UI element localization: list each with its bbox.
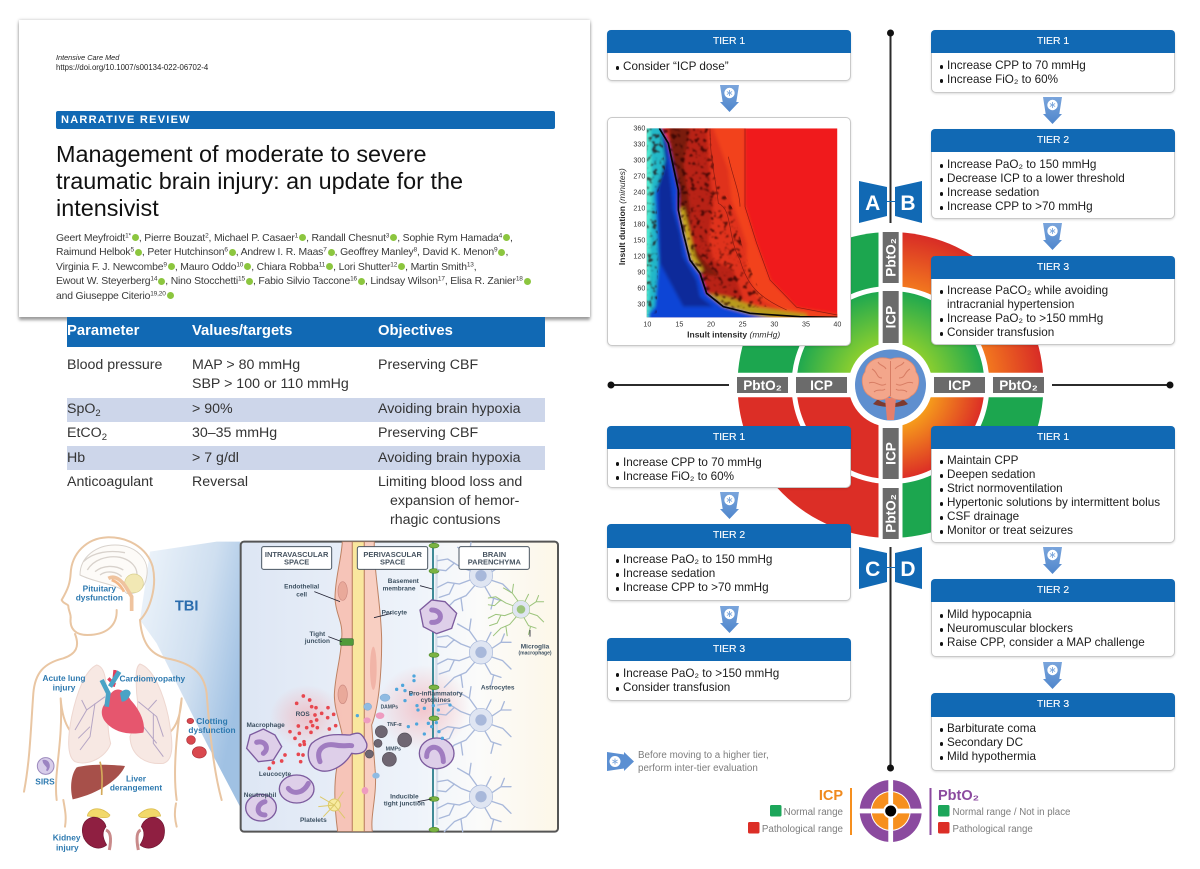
heart bbox=[102, 670, 144, 734]
panel D tier 2 bbox=[931, 579, 1175, 657]
cell and molecule labels: (macrophage) bbox=[518, 651, 552, 657]
badge D: D bbox=[900, 558, 916, 581]
region headers: SPACE bbox=[380, 558, 405, 567]
TBI label: TBI bbox=[175, 599, 198, 615]
row: anticoagulant: Limiting blood loss and bbox=[378, 474, 522, 490]
cell and molecule labels: cytokines bbox=[421, 697, 451, 704]
platelets bbox=[318, 792, 345, 818]
axis ticks: 20 bbox=[707, 320, 715, 328]
cell and molecule labels: tight junction bbox=[384, 801, 425, 808]
liver bbox=[71, 762, 125, 799]
axis ticks: 240 bbox=[633, 188, 645, 196]
row: anticoagulant: Reversal bbox=[192, 474, 248, 490]
cell and molecule labels: membrane bbox=[383, 585, 416, 592]
badge C: C bbox=[865, 558, 880, 581]
cell and molecule labels: Inducible bbox=[390, 793, 419, 800]
wheel inner ICP ring bbox=[796, 291, 984, 479]
article title bbox=[56, 141, 463, 221]
arrow D2 bbox=[1043, 662, 1062, 689]
panel B tier 2: TIER 2 bbox=[1037, 135, 1069, 146]
row: blood pressure: SBP > 100 or 110 mmHg bbox=[192, 376, 349, 392]
panel D tier 1: Strict normoventilation bbox=[947, 482, 1063, 495]
axis ticks: 330 bbox=[633, 141, 645, 149]
badge D bbox=[895, 547, 922, 589]
wheel grey sector labels: ICP bbox=[884, 306, 898, 328]
row: anticoagulant: rhagic contusions bbox=[390, 512, 500, 528]
astrocytes bbox=[438, 542, 511, 832]
row: SpO2 bbox=[67, 398, 545, 422]
wheel grey sector labels: ICP bbox=[810, 378, 833, 393]
cell and molecule labels bbox=[244, 578, 552, 824]
panel D tier 1: Hypertonic solutions by intermittent bolus bbox=[947, 496, 1160, 509]
region headers: BRAIN bbox=[482, 550, 506, 559]
panel B tier 3: TIER 3 bbox=[1037, 262, 1069, 273]
badge B bbox=[895, 181, 922, 223]
row: blood pressure: Preserving CBF bbox=[378, 357, 478, 373]
cell and molecule labels: Basement bbox=[388, 578, 420, 585]
author list: Geert Meyfroidt1* , Pierre Bouzat2, Michael P. Casaer1 , Randall Chesnut3 , Sophie Rym Hamada4 , bbox=[56, 232, 513, 244]
paper header card bbox=[19, 20, 590, 317]
organ labels bbox=[35, 583, 236, 852]
reactive oxygen species dots bbox=[269, 696, 336, 768]
cell and molecule labels: DAMPs bbox=[381, 704, 398, 710]
panel B tier 2: Increase PaO₂ to 150 mmHg bbox=[947, 158, 1096, 171]
vessel wall bbox=[334, 542, 382, 832]
legend: inter-tier evaluation arrow bbox=[607, 750, 769, 774]
cell and molecule labels: cell bbox=[296, 591, 307, 598]
arrow B2 bbox=[1043, 223, 1062, 250]
axis titles bbox=[617, 168, 780, 339]
basement membrane bbox=[429, 542, 439, 832]
axis ticks bbox=[633, 125, 841, 328]
body outline bbox=[24, 537, 222, 827]
legend: PbtO2: Normal range / Not in place bbox=[952, 807, 1070, 818]
row: SpO2: > 90% bbox=[192, 401, 233, 417]
axis ticks: 60 bbox=[637, 284, 645, 292]
panel B tier 2 bbox=[931, 129, 1175, 219]
brain bbox=[80, 545, 147, 611]
axis ticks: 10 bbox=[643, 320, 651, 328]
row: Hb: Hb bbox=[67, 450, 85, 466]
author list: Raimund Helbok5 , Peter Hutchinson6 , Andrew I. R. Maas7 , Geoffrey Manley8, David K. Menon9 , bbox=[56, 246, 508, 258]
panel D tier 3: Mild hypothermia bbox=[947, 750, 1036, 763]
axis ticks: 360 bbox=[633, 125, 645, 133]
icon: brain in centre bbox=[848, 343, 932, 427]
author list bbox=[56, 232, 531, 302]
row: EtCO2: Preserving CBF bbox=[378, 424, 478, 440]
row: blood pressure: MAP > 80 mmHg bbox=[192, 357, 300, 373]
cell and molecule labels: Microglia bbox=[521, 643, 550, 650]
panel C tier 2: TIER 2 bbox=[713, 530, 745, 541]
narrative review banner: NARRATIVE REVIEW bbox=[61, 114, 191, 126]
panel D tier 2: Raise CPP, consider a MAP challenge bbox=[947, 636, 1145, 649]
panel B tier 1: Increase FiO₂ to 60% bbox=[947, 73, 1058, 86]
region headers: SPACE bbox=[284, 558, 309, 567]
table header: Objectives bbox=[378, 323, 453, 339]
cell and molecule labels: MMPs bbox=[386, 747, 401, 753]
badge A: A bbox=[865, 192, 880, 215]
organ labels: injury bbox=[56, 842, 79, 852]
panel C tier 1: Increase CPP to 70 mmHg bbox=[623, 456, 762, 469]
panel C tier 2: Increase PaO₂ to 150 mmHg bbox=[623, 553, 772, 566]
contour lines bbox=[710, 128, 837, 315]
panel A tier 1: TIER 1 bbox=[713, 36, 745, 47]
organ labels: Acute lung bbox=[42, 673, 86, 683]
organ labels: Pituitary bbox=[83, 583, 116, 593]
mottled contour texture bbox=[646, 128, 766, 315]
cell and molecule labels: Endothelial bbox=[284, 584, 319, 591]
illustration: TBI systemic effects on the body bbox=[23, 536, 240, 852]
cell and molecule labels: Leucocyte bbox=[259, 771, 291, 778]
organ labels: Clotting bbox=[196, 716, 228, 726]
wheel grey sector labels: PbtO₂ bbox=[884, 238, 898, 277]
panel D tier 2: TIER 2 bbox=[1037, 585, 1069, 596]
wheel grey sector labels bbox=[737, 232, 1044, 539]
lungs bbox=[69, 664, 172, 764]
legend target icon bbox=[857, 778, 924, 844]
arrow D1 bbox=[1043, 547, 1062, 574]
author list: Ewout W. Steyerberg14 , Nino Stocchetti15 , Fabio Silvio Taccone16 , Lindsay Wilson17, Elisa R. Zanier18 bbox=[56, 276, 523, 287]
cell and molecule labels: Pericyte bbox=[382, 610, 407, 617]
legend: PbtO2: PbtO₂ bbox=[938, 788, 979, 804]
panel frame bbox=[241, 542, 558, 832]
panel D tier 1: Deepen sedation bbox=[947, 468, 1035, 481]
ICP and PbtO2 central wheel bbox=[607, 30, 1174, 842]
panel B tier 3: intracranial hypertension bbox=[947, 298, 1074, 311]
cell and molecule labels: Tight bbox=[309, 631, 326, 638]
author list: Virginia F. J. Newcombe9 , Mauro Oddo10 , Chiara Robba11 , Lori Shutter12 , Martin Smith13, bbox=[56, 261, 476, 272]
wheel grey sector labels: ICP bbox=[884, 442, 898, 465]
cell and molecule labels: TNF-α bbox=[387, 722, 402, 728]
cell nuclei bbox=[257, 610, 443, 815]
row: blood pressure: Blood pressure bbox=[67, 357, 162, 373]
panel D tier 2: Neuromuscular blockers bbox=[947, 622, 1073, 635]
row: EtCO2 bbox=[67, 424, 478, 442]
organ labels: dysfunction bbox=[188, 725, 236, 735]
panel C tier 2 bbox=[607, 524, 851, 601]
axis ticks: 25 bbox=[739, 320, 747, 328]
region headers: PARENCHYMA bbox=[468, 558, 522, 567]
row: anticoagulant: Anticoagulant bbox=[67, 474, 153, 490]
legend: PbtO2 bbox=[930, 788, 1070, 835]
microglia bbox=[488, 584, 544, 636]
row: SpO2: Avoiding brain hypoxia bbox=[378, 401, 520, 417]
axis ticks: 210 bbox=[633, 204, 645, 212]
panel D tier 3: Secondary DC bbox=[947, 736, 1023, 749]
panel D tier 3 bbox=[931, 693, 1175, 771]
table header: Parameter bbox=[67, 323, 139, 339]
arrow A bbox=[720, 85, 739, 112]
legend: ICP: ICP bbox=[819, 788, 843, 804]
panel B tier 2: Decrease ICP to a lower threshold bbox=[947, 172, 1125, 185]
panel D tier 1: Monitor or treat seizures bbox=[947, 524, 1073, 537]
DAMP fragments bbox=[362, 694, 390, 794]
annotation leader lines bbox=[314, 586, 530, 802]
wheel grey sector labels: PbtO₂ bbox=[884, 494, 898, 533]
row: anticoagulant: expansion of hemor- bbox=[390, 492, 519, 508]
legend: ICP bbox=[748, 788, 852, 835]
panel B tier 3: Increase PaO₂ to >150 mmHg bbox=[947, 312, 1103, 325]
row: Hb: Avoiding brain hypoxia bbox=[378, 450, 520, 466]
region headers bbox=[262, 547, 529, 569]
organ labels: dysfunction bbox=[76, 592, 123, 602]
row: SpO2: SpO2 bbox=[67, 401, 101, 419]
panel C tier 3: Consider transfusion bbox=[623, 681, 730, 694]
axis ticks: 90 bbox=[637, 268, 645, 276]
panel B tier 1 bbox=[931, 30, 1175, 93]
panel C tier 3: TIER 3 bbox=[713, 644, 745, 655]
inflammation glow bbox=[270, 665, 470, 752]
narrative review banner bbox=[56, 111, 555, 129]
panel A tier 1 bbox=[607, 30, 851, 81]
organ labels: Kidney bbox=[53, 833, 81, 843]
panel C tier 2: Increase sedation bbox=[623, 567, 715, 580]
panel D tier 3: Barbiturate coma bbox=[947, 722, 1036, 735]
author list: and Giuseppe Citerio19,20 bbox=[56, 290, 166, 302]
airway branches bbox=[75, 697, 163, 757]
cell and molecule labels: Neutrophil bbox=[244, 792, 276, 799]
panel B tier 3: Consider transfusion bbox=[947, 326, 1054, 339]
cell and molecule labels: ROS bbox=[296, 711, 310, 718]
panel D tier 1: CSF drainage bbox=[947, 510, 1019, 523]
panel B tier 1: TIER 1 bbox=[1037, 36, 1069, 47]
heat map plot bbox=[646, 128, 838, 318]
panel D tier 3: TIER 3 bbox=[1037, 699, 1069, 710]
organ labels: Liver bbox=[126, 774, 147, 784]
badge A bbox=[859, 181, 887, 223]
organ labels: injury bbox=[53, 682, 76, 692]
badge C bbox=[859, 547, 887, 589]
MMP particles bbox=[365, 726, 412, 766]
row: blood pressure bbox=[67, 357, 478, 392]
axis ticks: 270 bbox=[633, 172, 645, 180]
table: parameters, targets and objectives bbox=[67, 317, 545, 528]
immune cells bbox=[246, 600, 457, 821]
panel C tier 2: Increase CPP to >70 mmHg bbox=[623, 581, 769, 594]
icon: clotting red cells bbox=[187, 718, 206, 758]
axis titles: Insult intensity (mmHg) bbox=[687, 329, 780, 339]
icon: SIRS immune cell bbox=[37, 758, 54, 774]
cell and molecule labels: Macrophage bbox=[247, 722, 285, 729]
row: Hb: > 7 g/dl bbox=[192, 450, 239, 466]
axis ticks: 30 bbox=[770, 320, 778, 328]
article title: Management of moderate to severe bbox=[56, 141, 427, 167]
cell and molecule labels: Platelets bbox=[300, 817, 327, 824]
panel C tier 3: Increase PaO₂ to >150 mmHg bbox=[623, 667, 779, 680]
legend: inter-tier evaluation arrow: Before moving to a higher tier, bbox=[638, 750, 769, 761]
axis ticks: 15 bbox=[675, 320, 683, 328]
axes with end dots bbox=[608, 30, 1174, 772]
organ labels: derangement bbox=[110, 782, 162, 792]
region headers: PERIVASCULAR bbox=[363, 550, 423, 559]
axis ticks: 300 bbox=[633, 157, 645, 165]
legend: inter-tier evaluation arrow: perform inter-tier evaluation bbox=[638, 763, 758, 774]
axis ticks: 180 bbox=[633, 220, 645, 228]
panel D tier 1 bbox=[931, 426, 1175, 543]
axis titles: Insult duration (minutes) bbox=[617, 168, 627, 265]
cell and molecule labels: Pro-inflammatory bbox=[409, 691, 463, 698]
blue TBI wedge bbox=[140, 542, 240, 807]
organ labels: Cardiomyopathy bbox=[119, 674, 186, 684]
journal citation: Intensive Care Med bbox=[56, 53, 119, 62]
cell and molecule labels: Astrocytes bbox=[481, 684, 515, 691]
panel B tier 1: Increase CPP to 70 mmHg bbox=[947, 59, 1086, 72]
axis ticks: 30 bbox=[637, 300, 645, 308]
legend: ICP: Pathological range bbox=[762, 824, 844, 835]
panel C tier 1: Increase FiO₂ to 60% bbox=[623, 470, 734, 483]
journal citation bbox=[56, 53, 208, 72]
table header bbox=[67, 317, 545, 347]
wheel grey sector labels: PbtO₂ bbox=[999, 378, 1038, 393]
illustration: blood-brain barrier panel bbox=[240, 540, 559, 833]
panel B tier 3: Increase PaCO₂ while avoiding bbox=[947, 284, 1108, 297]
axis ticks: 35 bbox=[802, 320, 810, 328]
panel C tier 1: TIER 1 bbox=[713, 432, 745, 443]
row: EtCO2: 30–35 mmHg bbox=[192, 424, 277, 440]
badge B: B bbox=[900, 192, 916, 215]
panel B tier 2: Increase sedation bbox=[947, 186, 1039, 199]
panel C tier 3 bbox=[607, 638, 851, 701]
panel D tier 2: Mild hypocapnia bbox=[947, 608, 1031, 621]
cell and molecule labels: junction bbox=[304, 638, 330, 645]
arrow C1 bbox=[720, 492, 739, 519]
critical boundary curve bbox=[659, 128, 837, 317]
table header: Values/targets bbox=[192, 323, 292, 339]
kidneys bbox=[82, 809, 165, 850]
axis ticks: 150 bbox=[633, 236, 645, 244]
row: anticoagulant bbox=[67, 474, 522, 528]
panel B tier 3 bbox=[931, 256, 1175, 345]
panel D tier 1: Maintain CPP bbox=[947, 454, 1018, 467]
panel B tier 2: Increase CPP to >70 mmHg bbox=[947, 200, 1093, 213]
panel D tier 1: TIER 1 bbox=[1037, 432, 1069, 443]
article title: intensivist bbox=[56, 195, 159, 221]
wheel grey sector labels: PbtO₂ bbox=[743, 378, 782, 393]
row: EtCO2: EtCO2 bbox=[67, 424, 107, 442]
arrow C2 bbox=[720, 606, 739, 633]
axis ticks: 120 bbox=[633, 252, 645, 260]
wheel outer PbtO2 ring bbox=[738, 232, 1044, 538]
panel A tier 1: Consider “ICP dose” bbox=[623, 60, 729, 73]
chart: ICP dose heat map bbox=[607, 117, 851, 346]
axis ticks: 40 bbox=[833, 320, 841, 328]
arrow B1 bbox=[1043, 97, 1062, 124]
cytokine dots bbox=[357, 676, 450, 738]
legend: PbtO2: Pathological range bbox=[952, 824, 1033, 835]
journal citation: https://doi.org/10.1007/s00134-022-06702-4 bbox=[56, 63, 208, 72]
article title: traumatic brain injury: an update for the bbox=[56, 168, 463, 194]
row: Hb bbox=[67, 446, 545, 470]
wheel grey sector labels: ICP bbox=[948, 378, 971, 393]
region headers: INTRAVASCULAR bbox=[265, 550, 329, 559]
legend: ICP: Normal range bbox=[784, 807, 844, 818]
panel C tier 1 bbox=[607, 426, 851, 488]
organ labels: SIRS bbox=[35, 777, 55, 787]
